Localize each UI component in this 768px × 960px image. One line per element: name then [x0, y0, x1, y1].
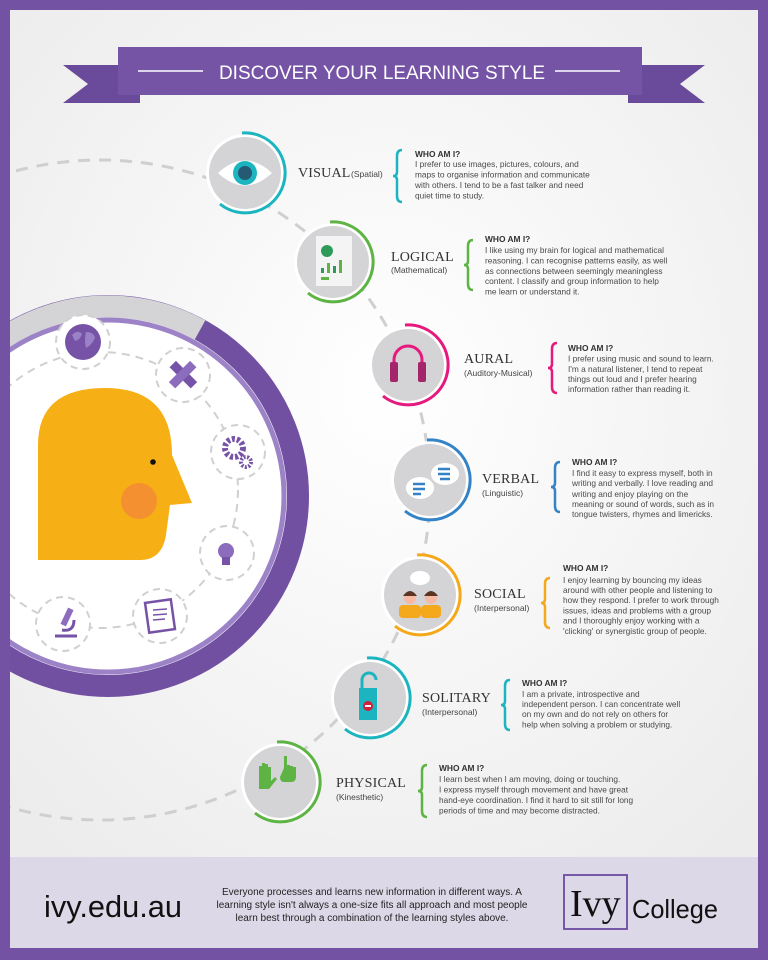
head [38, 388, 192, 560]
style: logical: WHO AM I? [485, 234, 530, 244]
style: visual: VISUAL [298, 166, 351, 181]
style: social: WHO AM I? [563, 563, 608, 573]
style: social [381, 555, 719, 636]
style: verbal: WHO AM I? [572, 457, 617, 467]
style: social: I enjoy learning by bouncing my ideas [563, 575, 702, 585]
title banner [63, 47, 705, 103]
footer text: learn best through a combination of the learning styles above. [236, 913, 508, 924]
icon: globe [56, 315, 110, 369]
style: verbal: (Linguistic) [482, 488, 523, 498]
style: visual: (Spatial) [351, 169, 383, 179]
style: solitary: (Interpersonal) [422, 707, 477, 717]
style: visual: I prefer to use images, pictures, colours, and [415, 159, 579, 169]
style: physical: I learn best when I am moving, doing or touching. [439, 774, 620, 784]
style: solitary: independent person. I can concentrate well [522, 699, 680, 709]
style: aural: things out loud and I prefer hearing [568, 374, 697, 384]
style: solitary: on my own and do not rely on others for [522, 709, 668, 719]
logo [564, 875, 718, 929]
style: aural: I prefer using music and sound to learn. [568, 354, 714, 364]
style: social: and I thoroughly enjoy working with a [563, 616, 700, 626]
style: logical: reasoning. I can recognise patterns easily, as well [485, 256, 668, 266]
style: verbal: I find it easy to express myself, both in [572, 468, 713, 478]
style: aural: information rather than reading it. [568, 384, 690, 394]
style: visual: maps to organise information and communicate [415, 170, 590, 180]
style: verbal: tongue twisters, rhymes and limericks. [572, 509, 713, 519]
style: verbal: meaning or sound of words, such as in [572, 499, 714, 509]
style: social: around with other people and listening to [563, 585, 713, 595]
style: verbal [391, 440, 714, 520]
style: physical: hand-eye coordination. I find it hard to sit still for long [439, 795, 634, 805]
logo: College [632, 894, 718, 924]
style: solitary: I am a private, introspective and [522, 689, 640, 699]
style: verbal: writing and enjoy playing on the [571, 489, 689, 499]
style: visual: with others. I tend to be a fast talker and need [414, 180, 584, 190]
style: logical [294, 222, 668, 302]
icon: gears [211, 425, 265, 479]
style: aural: AURAL [464, 352, 513, 367]
style: solitary: WHO AM I? [522, 678, 567, 688]
style: physical: PHYSICAL [336, 776, 406, 791]
style: logical: LOGICAL [391, 250, 454, 265]
style: aural [369, 325, 714, 405]
style: logical: as connections between seemingly meaningless [485, 266, 663, 276]
style: verbal: VERBAL [482, 472, 539, 487]
style: aural: WHO AM I? [568, 343, 613, 353]
footer [10, 857, 758, 948]
icon: lightbulb [200, 526, 254, 580]
logo: Ivy [570, 883, 621, 925]
title banner: DISCOVER YOUR LEARNING STYLE [219, 63, 545, 84]
style: social: 'clicking' or synergistic group of people. [563, 626, 707, 636]
style: visual [206, 133, 590, 213]
style: logical: (Mathematical) [391, 265, 447, 275]
style: logical: me learn or understand it. [485, 286, 580, 296]
style: social: (Interpersonal) [474, 603, 529, 613]
big circle with head [0, 296, 308, 696]
style: logical: I like using my brain for logical and mathematical [485, 245, 664, 255]
style: physical: I express myself through movement and have great [439, 784, 629, 794]
style: aural: (Auditory-Musical) [464, 368, 533, 378]
style: solitary: help when solving a problem or studying. [522, 720, 672, 730]
style: physical [241, 742, 634, 822]
style: visual: quiet time to study. [415, 190, 484, 200]
style: social: how they respond. I prefer to work through [563, 595, 719, 605]
style: social: SOCIAL [474, 587, 526, 602]
icon: pencil ruler [156, 348, 210, 402]
style: physical: (Kinesthetic) [336, 792, 383, 802]
icon: microscope [36, 597, 90, 651]
style: visual: WHO AM I? [415, 149, 460, 159]
style: physical: WHO AM I? [439, 763, 484, 773]
style: aural: I'm a natural listener, I tend to repeat [568, 364, 703, 374]
style: solitary [331, 658, 680, 738]
footer text: learning style isn't always a one-size fits all approach and most people [217, 900, 528, 911]
dashed path connecting styles [0, 160, 430, 820]
style: solitary: SOLITARY [422, 691, 491, 706]
style: social: issues, ideas and problems with a group [563, 606, 711, 616]
url: ivy.edu.au [44, 889, 182, 924]
style: logical: content. I classify and group information to help [485, 276, 659, 286]
style: physical: periods of time and may become distracted. [439, 806, 600, 816]
footer text: Everyone processes and learns new information in different ways. A [222, 887, 522, 898]
style: verbal: writing and verbally. I love reading and [571, 478, 713, 488]
icon: document [133, 589, 187, 643]
